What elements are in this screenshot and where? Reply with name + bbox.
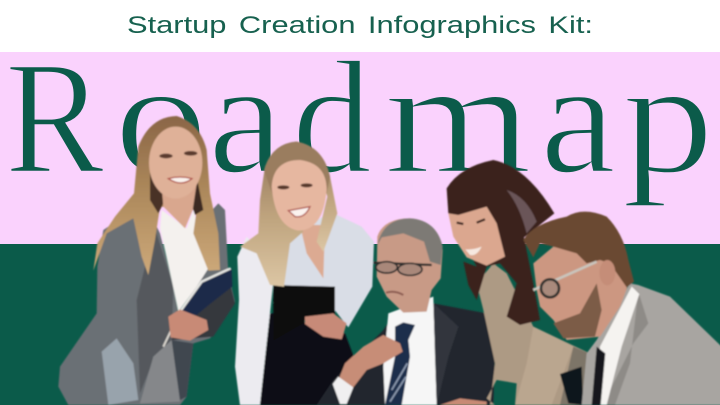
title: Roadmap xyxy=(5,29,714,208)
title: Roadmap: m xyxy=(384,29,532,208)
title: Roadmap: a xyxy=(208,29,284,208)
title: Roadmap: a xyxy=(540,29,616,208)
person: woman with tablet xyxy=(235,142,374,405)
person: woman with notebook xyxy=(58,116,235,405)
title: Roadmap: p xyxy=(622,29,714,208)
person: bearded man with glasses xyxy=(523,212,720,405)
white header band xyxy=(0,0,720,52)
person: man with striped tie xyxy=(317,218,495,405)
title: Roadmap: o xyxy=(114,29,208,208)
title: Roadmap: R xyxy=(5,29,104,208)
heading: kit name: Startup Creation Infographics Kit: xyxy=(127,12,593,39)
photo: business team xyxy=(58,116,720,405)
pink title band xyxy=(0,52,720,244)
person: brunette woman xyxy=(440,160,597,405)
green lower band xyxy=(0,244,720,405)
title: Roadmap: d xyxy=(292,29,372,208)
